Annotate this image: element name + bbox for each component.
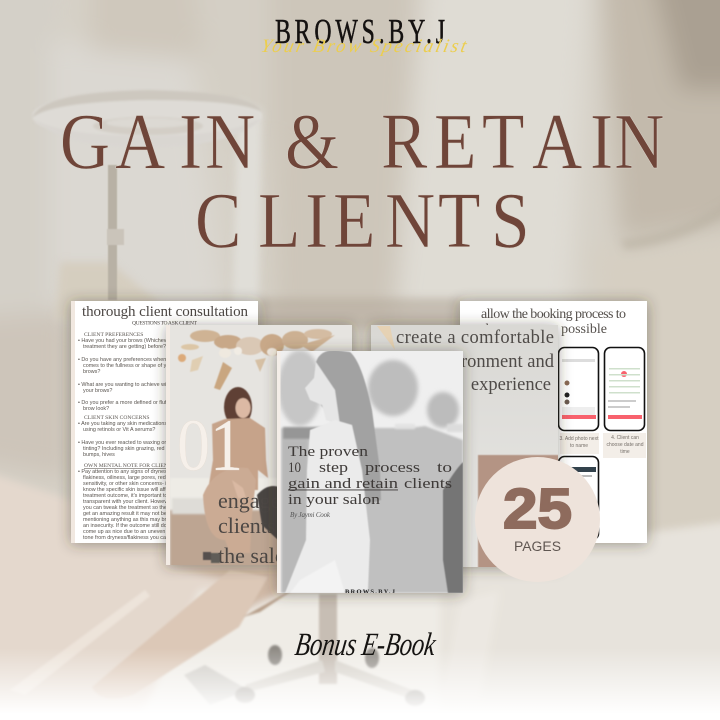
page: client consultation: tinting? Including skin grazing, red [83,446,165,452]
page: client consultation: CLIENT SKIN CONCERNS [84,415,149,421]
page: booking process: be as easy as possible [486,322,607,337]
cover brand: BROWS.BY.J [345,588,396,596]
chair and floor [0,470,720,720]
phone screenshot: calendar [604,348,644,430]
page: client consultation: sensitivity, or other skin concerns- if you [83,481,178,487]
page: client consultation: transparent with your client. However if [83,499,176,505]
cover heading: in your salon [288,492,381,508]
page: client consultation: treatment outcome, it's important to be [83,493,175,499]
page: comfortable environment: create a comfortable [396,328,554,348]
cover heading: to [437,460,452,476]
title [60,99,664,265]
caption: add photo: to name [570,443,588,449]
page: client consultation: get an amazing result it may not be worth [83,511,182,517]
page: comfortable environment [371,325,560,568]
page: client consultation: QUESTIONS TO ASK CLIENT [132,320,198,326]
page: client consultation [71,301,258,543]
page: booking process: allow the booking process to [481,307,626,322]
caption: add photo: 3. Add photo next [560,436,599,442]
cover heading: clients [404,476,452,492]
cover heading: process [365,460,420,476]
page: ebook cover [277,350,463,596]
page: client consultation: • Have you had your brows (Whichever [78,338,171,344]
heading: engage: clients in [218,513,298,538]
page: client consultation: comes to the fullness or shape of your [83,363,174,369]
cover author: By Jaymi Cook [290,511,331,519]
brand logo: BROWS.BY.J [275,13,445,51]
caption: add photo [560,433,599,454]
woman photo [203,387,285,563]
page: client consultation: brows? [83,369,100,375]
page: client consultation: your brows? [83,388,112,394]
caption: date and time: 4. Client can [611,435,639,441]
page: client consultation: flakiness, oiliness, large pores, redness [83,475,177,481]
title: GAIN & RETAIN [60,99,664,186]
caption: date and time [603,433,646,458]
page: client consultation: • Do you have any preferences when it [78,357,171,363]
phone screenshot: add photo [558,348,598,430]
page: client consultation: • Are you taking any skin medications, [78,421,169,427]
page: client consultation: CLIENT PREFERENCES [84,332,143,338]
page: client consultation: know the specific skin issue will affect the [83,487,182,493]
page: client consultation: thorough client consultation [82,304,248,320]
label: pages: PAGES [514,539,561,554]
cover heading [288,444,452,508]
tagline: Your Brow Specialist [259,36,469,57]
caption: bonus e-book: Bonus E-Book [293,627,439,663]
badge: 25 pages [475,457,600,582]
page: client consultation: tone from dryness/flakiness you can [83,535,169,541]
page: engage clients [166,325,352,568]
title: CLIENTS [195,178,530,265]
cover photo [278,350,463,593]
page: client consultation: you can tweak the treatment so they still [83,505,179,511]
page: client consultation: mentioning anything as this may bring up [83,517,181,523]
heading: engage [218,496,277,563]
cover heading: gain and retain [288,476,399,492]
page: client consultation: • Have you ever reacted to waxing or [78,440,166,446]
armrest [92,570,268,699]
number 25: 25 [503,477,572,541]
page: client consultation: • Do you prefer a more defined or fluffier [78,400,174,406]
page: client consultation: an insecurity. If the outcome still doesn't [83,523,179,529]
cover heading: 10 [288,460,301,476]
heading: engage: engage with [218,488,325,513]
big number: 01 [177,405,243,487]
page: client consultation: come up as nice due to an uneven skin [83,529,177,535]
page: booking process [460,301,647,543]
page: client consultation: treatment they are getting) before? [83,344,166,350]
lamp [32,90,262,300]
cover heading: The proven [288,444,369,460]
page: client consultation: • What are you wanting to achieve with [78,382,171,388]
heading: engage: the salon [218,543,297,568]
phone screenshot: third [558,456,598,540]
page: comfortable environment: environment and [429,352,555,372]
caption: date and time: time [620,449,630,455]
bench and floor [170,500,277,565]
page: client consultation: brow look? [83,406,109,412]
page: client consultation: using retinols or Vit A serums? [83,427,155,433]
floral arrangement [178,329,335,390]
page: client consultation: • Pay attention to any signs of dryness [78,469,170,475]
page: client consultation: bumps, hives [83,452,115,458]
caption: date and time: choose date and [607,442,644,448]
cover heading: step [319,460,348,476]
page: comfortable environment: experience [471,375,551,395]
page: client consultation: OWN MENTAL NOTE FOR CLIENT [84,463,172,469]
